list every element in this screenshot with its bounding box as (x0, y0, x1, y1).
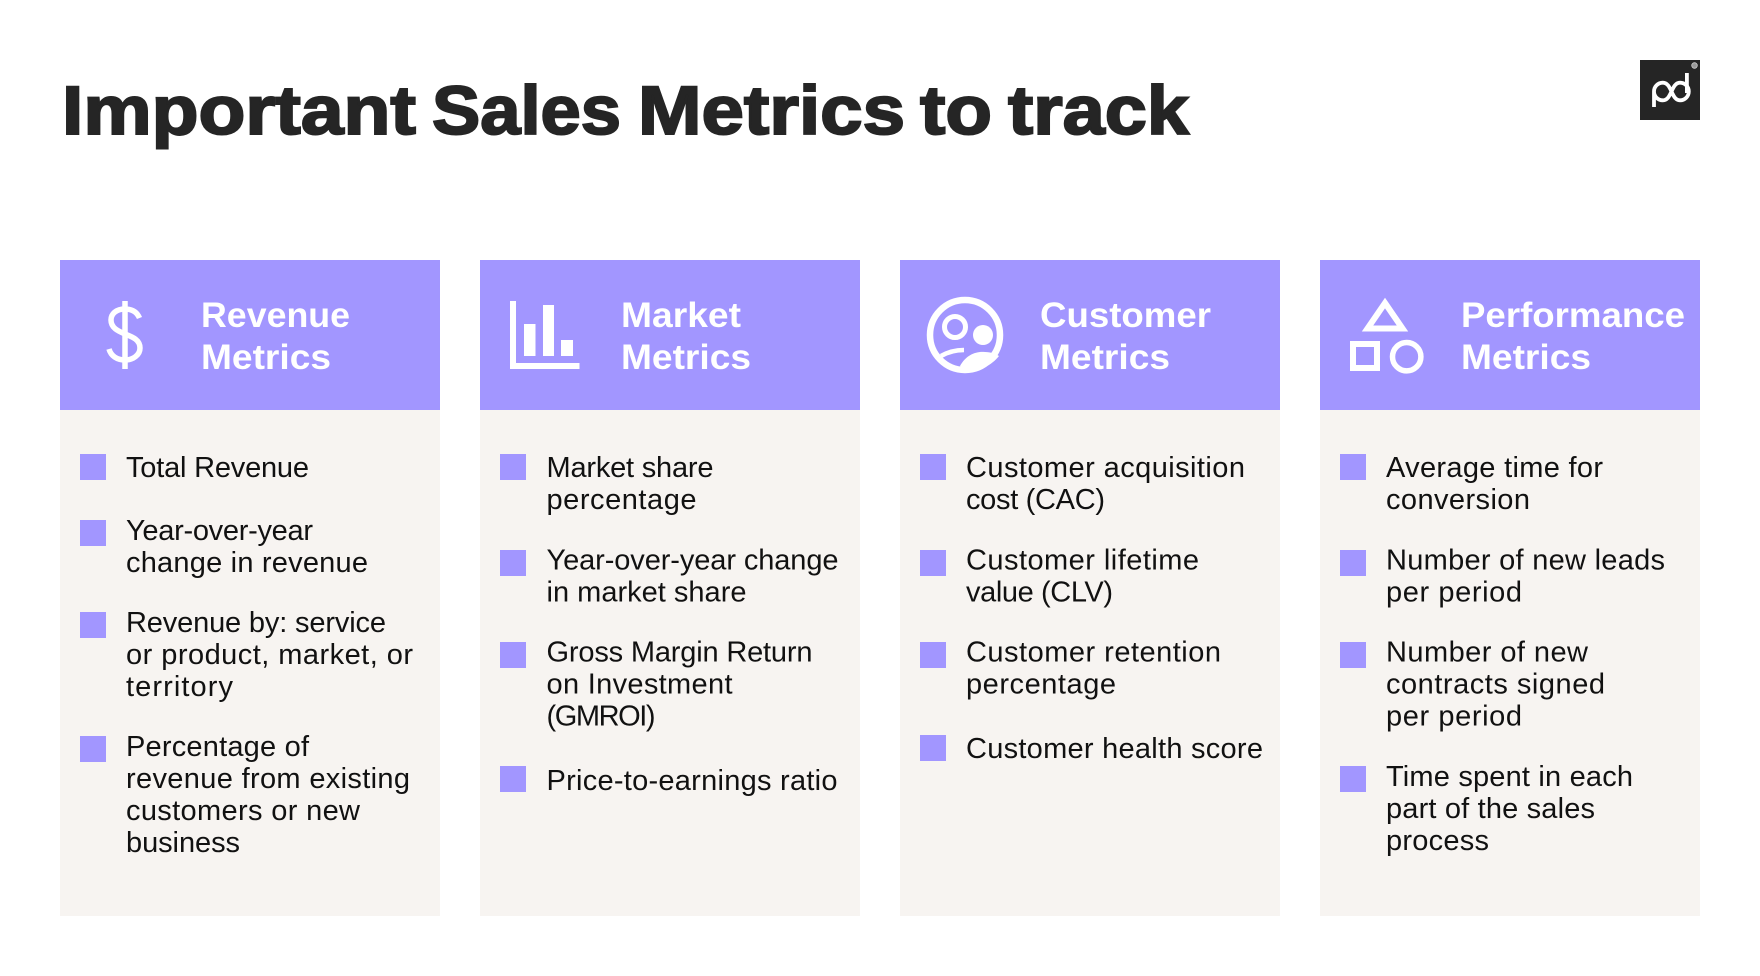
list: market metrics: on Investment (546, 668, 732, 700)
list: revenue metrics: Revenue by: service (126, 607, 386, 639)
list: market metrics: (GMROI) (546, 700, 656, 732)
list: performance metrics: contracts signed (1386, 668, 1605, 700)
title: Metrics (638, 72, 905, 149)
list: performance metrics: Average time for (1386, 452, 1603, 484)
list: revenue metrics: customers or new (126, 795, 361, 827)
list: market metrics: in market share (546, 576, 746, 608)
title: track (1008, 72, 1190, 149)
icon: customer faces (930, 300, 1000, 372)
heading: Performance (1461, 296, 1685, 335)
list: revenue metrics: Percentage of (126, 731, 310, 763)
list: customer metrics: percentage (966, 668, 1116, 700)
list: revenue metrics (80, 452, 413, 859)
title: to (920, 72, 992, 149)
list: market metrics (500, 452, 838, 797)
list: performance metrics: process (1386, 825, 1489, 857)
list: customer metrics: value (CLV) (966, 576, 1113, 608)
panel: market metrics (480, 260, 860, 916)
heading: Customer (1040, 296, 1211, 335)
icon: dollar sign (109, 301, 140, 369)
list: customer metrics: Customer retention (966, 636, 1221, 668)
list: performance metrics: per period (1386, 700, 1522, 732)
list: customer metrics (920, 452, 1263, 765)
header: performance metrics (1320, 260, 1700, 410)
title: Sales (432, 72, 621, 149)
icon: bar chart (510, 301, 580, 369)
list: revenue metrics: Total Revenue (126, 452, 309, 484)
list: performance metrics: Number of new (1386, 636, 1589, 668)
heading: Metrics (201, 338, 331, 377)
heading: Metrics (1040, 338, 1170, 377)
header: market metrics (480, 260, 860, 410)
list: revenue metrics: territory (126, 671, 234, 703)
list: performance metrics (1340, 452, 1665, 857)
heading: Metrics (621, 338, 751, 377)
heading: Metrics (1461, 338, 1591, 377)
list: market metrics: percentage (546, 484, 696, 516)
list: revenue metrics: or product, market, or (126, 639, 413, 671)
list: revenue metrics: revenue from existing (126, 763, 410, 795)
icon: shapes (1353, 303, 1421, 371)
heading (201, 296, 350, 377)
list: performance metrics: Number of new leads (1386, 544, 1665, 576)
list: market metrics: Market share (546, 452, 714, 484)
title (62, 72, 1190, 149)
heading (621, 296, 751, 377)
list: customer metrics: Customer lifetime (966, 544, 1199, 576)
list: revenue metrics: business (126, 827, 240, 859)
list: market metrics: Gross Margin Return (546, 636, 812, 668)
panel: revenue metrics (60, 260, 440, 916)
list: market metrics: Year-over-year change (546, 544, 838, 576)
heading: Revenue (201, 296, 350, 335)
heading (1040, 296, 1211, 377)
list: customer metrics: cost (CAC) (966, 484, 1105, 516)
list: performance metrics: conversion (1386, 484, 1530, 516)
title: Important (62, 72, 416, 149)
list: customer metrics: Customer health score (966, 733, 1263, 765)
list: market metrics: Price-to-earnings ratio (546, 765, 838, 797)
logo (1640, 60, 1700, 120)
list: revenue metrics: change in revenue (126, 547, 368, 579)
heading (1461, 296, 1685, 377)
list: performance metrics: Time spent in each (1386, 761, 1633, 793)
heading: Market (621, 296, 741, 335)
panel: performance metrics (1320, 260, 1700, 916)
panel: customer metrics (900, 260, 1280, 916)
header: revenue metrics (60, 260, 440, 410)
list: customer metrics: Customer acquisition (966, 452, 1245, 484)
header: customer metrics (900, 260, 1280, 410)
list: performance metrics: per period (1386, 576, 1522, 608)
list: revenue metrics: Year-over-year (126, 515, 313, 547)
list: performance metrics: part of the sales (1386, 793, 1595, 825)
